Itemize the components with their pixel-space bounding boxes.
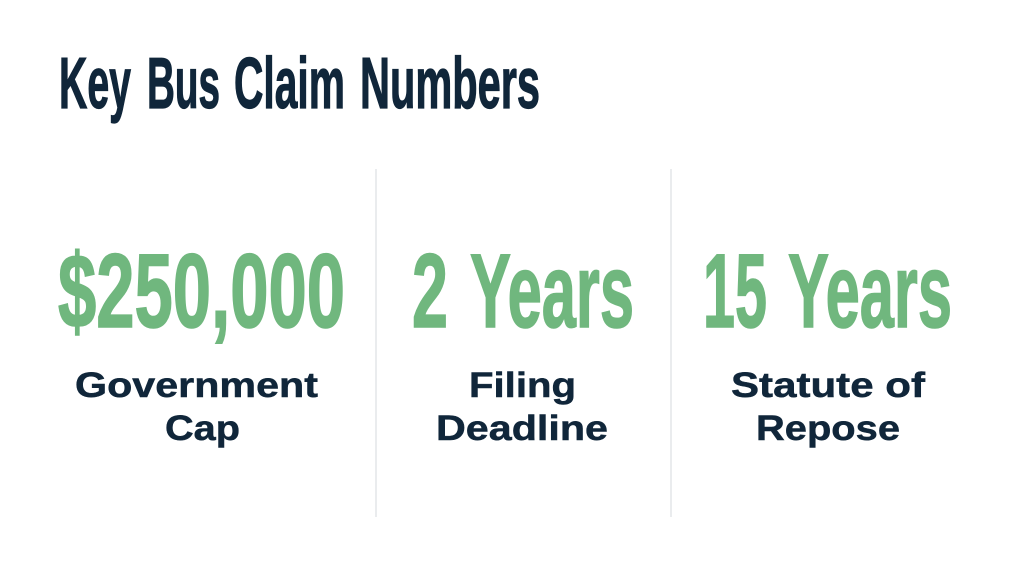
stat: $250,000: $250,000 [58,233,345,350]
label: Filing Deadline: Filing [469,366,576,405]
stat: 2 Years [412,233,634,350]
panel: filing deadline [412,233,634,448]
panel: government cap [58,233,345,448]
label: Filing Deadline [436,366,608,448]
stat: 2 Years: Years [470,233,634,350]
panel: statute of repose [703,233,952,448]
title: Claim [234,44,345,124]
label: Statute of Repose [731,366,925,448]
label: Government Cap: Government [75,366,318,405]
label: Government Cap [75,366,318,448]
title: Numbers [360,44,540,124]
label: Government Cap: Cap [165,409,240,448]
title [59,44,540,124]
title: Bus [147,44,220,124]
stat: 2 Years: 2 [412,233,448,350]
title: Key [59,44,131,124]
stat: 15 Years [703,233,952,350]
label: Statute of Repose: Statute of [731,366,925,405]
label: Filing Deadline: Deadline [436,409,608,448]
label: Statute of Repose: Repose [756,409,900,448]
stat: 15 Years: 15 [703,233,767,350]
